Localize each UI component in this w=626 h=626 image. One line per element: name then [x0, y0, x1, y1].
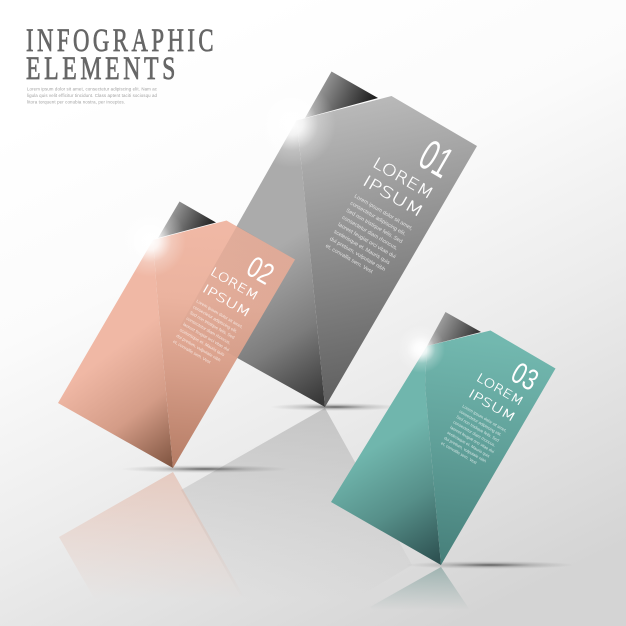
reflection: peach card — [59, 472, 243, 626]
body text: Sed non tristique felis. Sed — [455, 414, 501, 443]
title: INFOGRAPHIC — [26, 23, 217, 59]
body text: dui pretium, vulputate nibh — [443, 435, 488, 464]
intro text — [27, 86, 158, 104]
body text: scelerisque et. Mauris quis — [332, 229, 391, 266]
title block — [26, 23, 217, 104]
body text: laoreet feugiat orci vitae dui — [449, 425, 495, 454]
body text: scelerisque et. Mauris quis — [446, 430, 491, 459]
heading: IPSUM — [360, 172, 427, 221]
body text: consectetur diam rhoncus, — [341, 215, 399, 252]
body text: dui pretium, vulputate nibh — [176, 333, 222, 363]
panel: gray card 01 — [180, 72, 477, 407]
heading — [360, 154, 437, 221]
number: 01 — [411, 131, 461, 188]
heading: IPSUM — [466, 386, 518, 425]
body text: consectetur diam rhoncus, — [186, 316, 232, 345]
glow: peach card — [114, 205, 186, 277]
body text: laoreet feugiat orci vitae dui — [337, 222, 397, 260]
heading: LOREM — [370, 154, 437, 203]
intro text: Lorem ipsum dolor sit amet, consectetur adipiscing elit. Nam ac — [27, 86, 158, 92]
card faces — [58, 220, 295, 468]
heading: LOREM — [474, 370, 526, 409]
body text: Lorem ipsum dolor sit amet, — [462, 404, 508, 433]
panel: teal card 03 — [331, 312, 556, 565]
shadow: peach card — [120, 465, 290, 473]
heading — [466, 370, 526, 425]
card faces — [331, 330, 556, 565]
title — [26, 23, 217, 87]
panel: peach card 02 — [58, 202, 295, 468]
body text: et, convallis sem. Vest — [440, 441, 478, 466]
number: 03 — [506, 356, 544, 398]
body text: consectetur adipiscing elit. — [192, 304, 238, 334]
body text: consectetur adipiscing elit. — [458, 409, 503, 437]
card faces — [180, 96, 477, 407]
shadow: teal card — [405, 561, 575, 569]
body text: Lorem ipsum dolor sit amet, — [196, 299, 244, 329]
intro text: litora torquent per conubia nostra, per inceptos. — [27, 100, 125, 104]
body text: consectetur diam rhoncus, — [452, 419, 496, 448]
body text: Sed non tristique felis. Sed — [345, 208, 403, 245]
body text: consectetur adipiscing elit. — [349, 201, 407, 237]
heading: IPSUM — [200, 281, 253, 320]
body text: Sed non tristique felis. Sed — [189, 310, 236, 340]
body text: Lorem ipsum dolor sit amet, — [353, 194, 414, 232]
heading: LOREM — [208, 264, 261, 303]
shadow: gray card — [270, 403, 400, 411]
body text: scelerisque et. Mauris quis — [179, 327, 225, 357]
reflection: teal card — [370, 567, 480, 625]
glow: teal card — [397, 325, 445, 373]
heading — [200, 264, 261, 320]
title: ELEMENTS — [26, 51, 179, 87]
tab — [427, 312, 481, 346]
glow: gray card — [248, 80, 336, 168]
body text: et, convallis sem. Vest — [324, 243, 374, 275]
reflection: gray card — [181, 408, 412, 626]
tab — [158, 202, 216, 238]
body text: dui pretium, vulputate nibh — [328, 236, 386, 273]
body text: et, convallis sem. Vest — [172, 339, 212, 365]
body text: laoreet feugiat orci vitae dui — [182, 322, 230, 352]
number: 02 — [241, 250, 279, 292]
intro text: ligula quis velit efficitur tincidunt. Class aptent taciti sociosqu ad — [27, 93, 158, 98]
tab — [305, 72, 378, 118]
